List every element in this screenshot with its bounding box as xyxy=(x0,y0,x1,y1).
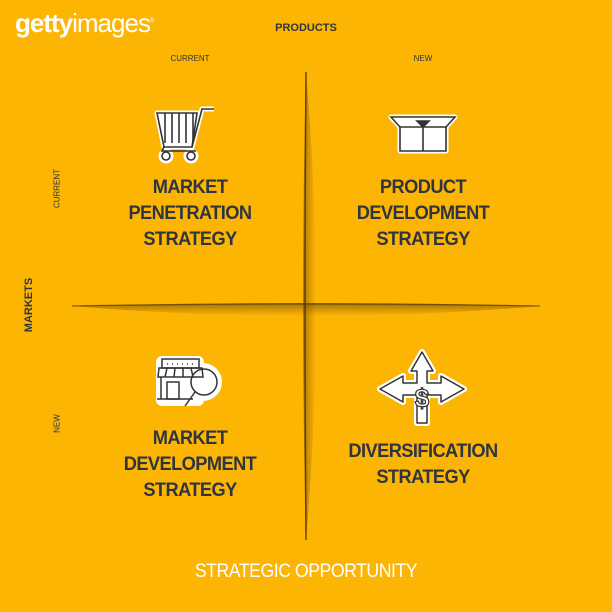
text: market penetration: STRATEGY xyxy=(143,229,237,250)
text: market penetration xyxy=(128,177,252,250)
text: market development: DEVELOPMENT xyxy=(124,454,256,475)
text: market development: STRATEGY xyxy=(143,480,237,501)
heading: products: PRODUCTS xyxy=(275,22,337,34)
text: market penetration: MARKET xyxy=(153,177,227,198)
text: product development xyxy=(357,177,490,250)
footer: strategic opportunity: STRATEGIC OPPORTUNITY xyxy=(195,561,417,582)
label: new products: NEW xyxy=(414,54,432,63)
text: product development: PRODUCT xyxy=(380,177,466,198)
text: market penetration: PENETRATION xyxy=(128,203,252,224)
heading: markets: MARKETS xyxy=(23,278,35,332)
label: new markets: NEW xyxy=(52,414,62,433)
icon: shopping cart xyxy=(154,106,214,164)
icon: arrows with dollar xyxy=(377,349,467,426)
icon: open box xyxy=(388,114,458,154)
text: diversification: DIVERSIFICATION xyxy=(348,441,498,462)
icon: store with magnifier xyxy=(156,356,222,406)
logo: gettyimages® xyxy=(15,8,153,38)
text: diversification xyxy=(348,441,498,488)
text: market development xyxy=(124,428,257,501)
icon: arrows with dollar: $ xyxy=(415,383,430,413)
text: market development: MARKET xyxy=(153,428,227,449)
text: diversification: STRATEGY xyxy=(376,467,470,488)
label: current markets: CURRENT xyxy=(52,169,62,208)
label: current products: CURRENT xyxy=(170,54,210,63)
text: product development: DEVELOPMENT xyxy=(357,203,489,224)
text: product development: STRATEGY xyxy=(376,229,470,250)
